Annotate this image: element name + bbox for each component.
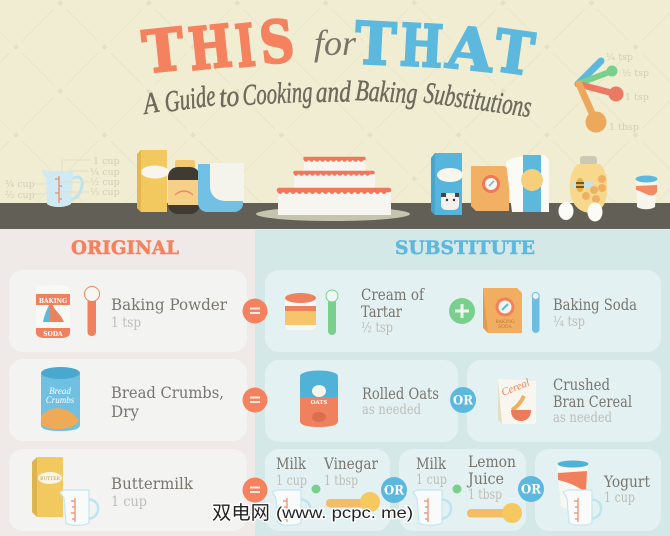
row 2 substitute: crushed bran cereal: Crushed — [553, 375, 610, 394]
icon: buttermilk carton: BUTTER — [40, 476, 61, 482]
measuring cup with labels — [5, 156, 120, 207]
or badge row 3 second — [518, 476, 544, 502]
yellow flour box — [137, 150, 169, 212]
row 1 original: baking powder: 1 tsp — [111, 315, 141, 331]
subtitle: Substitutions — [422, 76, 534, 124]
background: cream header with lattice — [0, 0, 670, 204]
row 1 substitute: cream of tartar plus baking soda: Cream of — [361, 285, 425, 304]
row 1 original: baking powder: Baking Powder — [111, 295, 227, 314]
row 2 substitute: crushed bran cereal: Bran Cereal — [553, 392, 632, 411]
or badge row 2: OR — [453, 394, 473, 408]
measuring spoons: ½ tsp — [622, 68, 649, 79]
row 3 substitute: yogurt: 1 cup — [604, 490, 635, 506]
icon: yellow spoon — [326, 492, 380, 512]
subtitle: Baking — [355, 74, 418, 110]
row 1 substitute: cream of tartar plus baking soda: ¼ tsp — [553, 314, 585, 330]
row 3 substitute: milk and lemon juice: Juice — [466, 469, 504, 488]
icon: bread crumbs can: Bread — [49, 386, 71, 396]
row 2 original: bread crumbs: Dry — [111, 402, 139, 421]
row 1 substitute: cream of tartar plus baking soda: Tartar — [361, 302, 402, 321]
measuring spoons — [578, 52, 649, 133]
row 3 substitute: milk and vinegar: Vinegar — [323, 454, 378, 473]
icon: measuring cup — [413, 490, 451, 525]
icon: blue spoon — [532, 292, 540, 333]
title: THIS for THAT: A — [443, 13, 497, 86]
watermark: 双电网 — [212, 498, 270, 525]
icon: oats can — [300, 370, 338, 427]
measuring spoons: ¼ tsp — [606, 52, 633, 63]
measuring cup with labels: ¼ cup — [90, 167, 120, 178]
molasses jar — [168, 160, 200, 214]
yogurt cup — [636, 176, 658, 209]
or badge row 3 second: OR — [521, 482, 541, 498]
row 3 substitute: milk and vinegar — [265, 449, 390, 531]
row 2 substitute: crushed bran cereal — [467, 360, 661, 442]
title: THIS for THAT: T — [353, 9, 398, 79]
icon: bread crumbs can — [41, 367, 80, 431]
measuring spoons: 1 tsp — [625, 92, 649, 103]
icon: measuring cup — [60, 490, 98, 525]
row 1 substitute: cream of tartar plus baking soda — [265, 270, 661, 352]
row 3 substitute: yogurt: Yogurt — [603, 472, 650, 491]
title: THIS for THAT: for — [314, 23, 357, 63]
row 3 substitute: milk and lemon juice: Milk — [416, 454, 446, 473]
panel: substitute background — [255, 230, 670, 536]
icon: baking powder can: BAKING — [39, 298, 67, 305]
icon: oats can: OATS — [311, 400, 327, 406]
icon: cream of tartar can — [285, 293, 316, 330]
row 2 substitute: rolled oats — [265, 360, 458, 442]
equals badge row 3 — [242, 478, 268, 502]
icon: yogurt container — [557, 460, 588, 509]
title: THIS for THAT: H — [185, 12, 235, 84]
title: THIS for THAT: S — [256, 7, 297, 78]
plus badge — [449, 298, 475, 324]
row 3 original: buttermilk — [9, 449, 247, 531]
icon: cereal box — [498, 377, 536, 424]
row 3 substitute: milk and lemon juice: 1 tbsp — [468, 487, 502, 503]
measuring cup with labels: 1 cup — [93, 156, 120, 167]
icon: measuring cup — [272, 490, 310, 525]
cake on plate — [256, 158, 410, 221]
icon: bread crumbs can: Crumbs — [46, 395, 75, 405]
title: THIS for THAT: I — [232, 11, 258, 81]
eggs — [558, 202, 602, 222]
orange baking soda box — [471, 166, 509, 211]
blue cup of milk — [198, 163, 244, 212]
heading: substitute: SUBSTITUTE — [395, 237, 535, 259]
row 2 substitute: rolled oats: Rolled Oats — [362, 384, 439, 403]
subtitle: Guide — [162, 79, 217, 119]
row 3 substitute: milk and vinegar: 1 tbsp — [324, 473, 358, 489]
measuring cup with labels: ¾ cup — [5, 179, 35, 190]
title: THIS for THAT — [139, 7, 538, 89]
row 3 substitute: milk and lemon juice — [399, 449, 526, 531]
subtitle: Cooking — [242, 75, 313, 112]
equals badge row 2 — [242, 388, 268, 412]
subtitle: and — [316, 75, 352, 109]
row 2 original: bread crumbs: Bread Crumbs, — [111, 383, 224, 402]
or badge row 3 first — [381, 477, 407, 503]
measuring cup with labels: ⅓ cup — [90, 187, 120, 198]
honey jar with bee — [570, 156, 607, 213]
icon: baking soda box: SODA — [498, 324, 513, 330]
row 3 substitute: milk and vinegar: Milk — [276, 454, 306, 473]
title: THIS for THAT: H — [398, 11, 445, 81]
row 3 substitute: milk and lemon juice: 1 cup — [416, 472, 447, 488]
title: THIS for THAT: T — [139, 15, 187, 87]
row 2 substitute: crushed bran cereal: as needed — [553, 410, 612, 426]
or badge row 3 first: OR — [384, 484, 404, 498]
measuring cup with labels: ⅔ cup — [5, 190, 35, 201]
row 1 substitute: cream of tartar plus baking soda: ½ tsp — [361, 320, 393, 336]
subtitle: A — [139, 86, 162, 121]
or badge row 2 — [450, 387, 476, 413]
icon: baking soda box: BAKING — [495, 319, 515, 325]
row 1 substitute: cream of tartar plus baking soda: Baking Soda — [553, 295, 637, 314]
icon: buttermilk carton — [32, 457, 63, 517]
measuring cup with labels: ½ cup — [90, 177, 120, 188]
row 3 substitute: milk and lemon juice: Lemon — [468, 452, 516, 471]
row 3 substitute: milk and vinegar: 1 cup — [276, 473, 307, 489]
title: THIS for THAT: T — [490, 17, 538, 89]
icon: baking powder can: SODA — [43, 331, 63, 338]
row 1 original: baking powder — [9, 270, 247, 352]
row 3 substitute: yogurt — [535, 449, 661, 531]
row 2 substitute: rolled oats: as needed — [362, 402, 421, 418]
watermark: (www. pcpc. me) — [276, 505, 413, 522]
counter top — [0, 203, 670, 229]
watermark — [212, 498, 413, 525]
equals badge row 1 — [242, 298, 268, 324]
row 3 original: buttermilk: 1 cup — [111, 494, 147, 510]
icon: yellow spoon — [467, 503, 522, 523]
measuring spoons: 1 tbsp — [609, 122, 639, 133]
row 3 original: buttermilk: Buttermilk — [111, 474, 193, 493]
icon: measuring cup — [563, 490, 601, 525]
subtitle — [139, 74, 534, 124]
icon: baking powder can — [36, 285, 70, 338]
icon: orange spoon — [84, 286, 100, 336]
icon: baking soda box — [483, 288, 522, 333]
icon: cereal box: Cereal — [500, 377, 532, 399]
icon: green spoon — [326, 290, 338, 335]
panel: original background — [0, 230, 255, 536]
subtitle: to — [218, 79, 241, 114]
white and blue bag with medal — [506, 155, 549, 212]
row 2 original: bread crumbs — [9, 359, 247, 441]
milk carton with cow — [431, 153, 463, 215]
heading: original: ORIGINAL — [71, 237, 179, 259]
